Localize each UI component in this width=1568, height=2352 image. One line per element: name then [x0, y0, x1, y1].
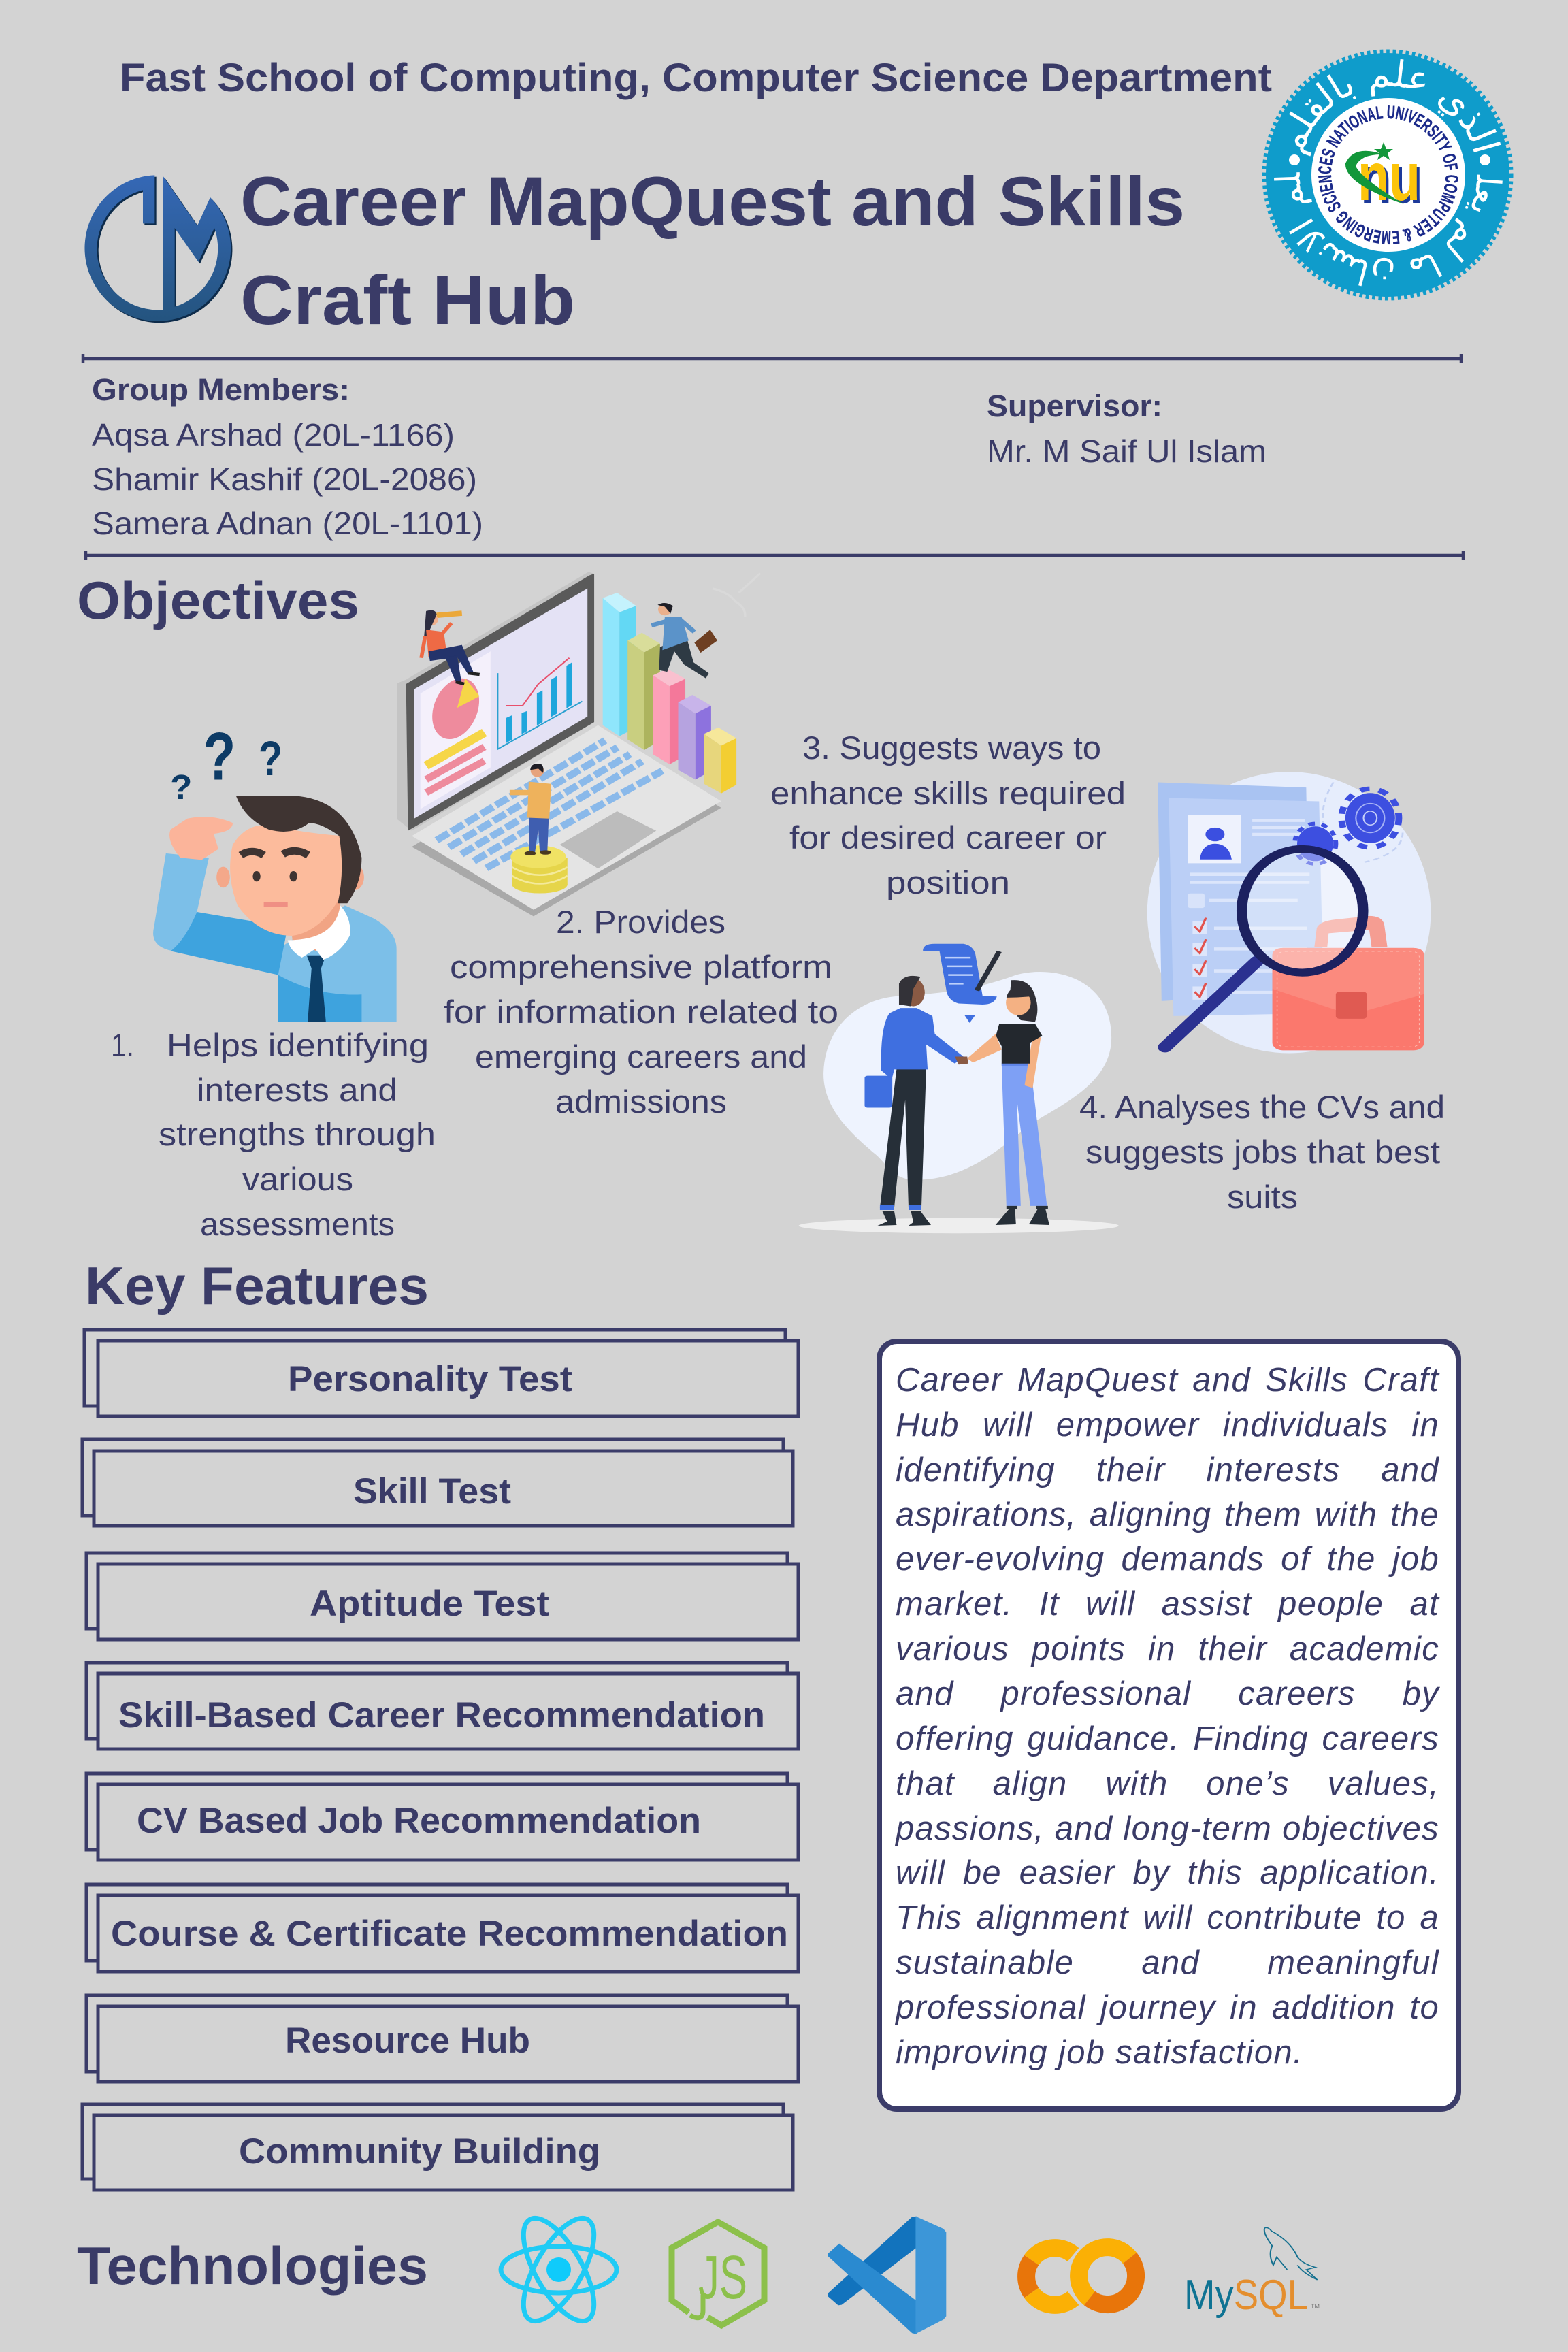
text panel: project description: professional journey in addition to [896, 1989, 1439, 2026]
text panel: project description: This alignment will contribute to a [896, 1899, 1439, 1936]
text: supervisor [987, 389, 1267, 469]
text: objective 2: emerging careers and [475, 1039, 807, 1075]
text panel: project description: offering guidance. Finding careers [896, 1720, 1439, 1757]
feature: resource hub [86, 1995, 798, 2082]
feature: skill test: Skill Test [353, 1471, 511, 1512]
text: group members: Aqsa Arshad (20L-1166) [92, 417, 455, 453]
text: objective 1: Helps identifying [167, 1027, 429, 1063]
text: objective 2: for information related to [444, 994, 838, 1030]
text: objective 1: 1. [111, 1027, 134, 1063]
illustration: thinking man with question marks [153, 719, 397, 1022]
icon: vs code [828, 2217, 946, 2334]
feature: personality test: Personality Test [288, 1359, 572, 1399]
feature: skill-based career recommendation: Skill-Based Career Recommendation [118, 1695, 765, 1735]
text: supervisor: Supervisor: [987, 389, 1162, 423]
text panel: project description: improving job satisfaction. [896, 2034, 1303, 2071]
feature: skill test [82, 1439, 793, 1526]
icon: react [501, 2208, 617, 2332]
text panel: project description: will be easier by this application. [896, 1855, 1439, 1891]
illustration: thinking man with question marks: ? [259, 731, 282, 785]
heading: key features: Key Features [85, 1256, 429, 1316]
text: objective 4: suits [1227, 1179, 1298, 1215]
text: objective 3: enhance skills required [770, 775, 1126, 811]
logo: university seal: NATIONAL UNIVERSITY OF COMPUTER & EMERGING SCIENCES [1318, 105, 1458, 245]
illustration: handshake with contract [799, 944, 1119, 1233]
icon: mysql [1184, 2227, 1320, 2319]
feature: community building [82, 2104, 793, 2190]
icon: mysql: TM [1311, 2303, 1320, 2310]
text panel: project description: ever-evolving demands of the job [896, 1541, 1439, 1578]
icon: node js: JS [698, 2244, 747, 2312]
feature: skill-based career recommendation [86, 1663, 798, 1749]
icon: mysql: MySQL [1184, 2272, 1308, 2319]
text panel: project description: sustainable and meaningful [896, 1944, 1439, 1981]
feature: aptitude test [86, 1553, 798, 1639]
text panel: project description: market. It will assist people at [896, 1586, 1439, 1622]
text: group members: Samera Adnan (20L-1101) [92, 506, 483, 541]
text: objective 4: 4. Analyses the CVs and [1079, 1089, 1445, 1125]
logo: university seal: nu [1360, 142, 1423, 218]
text panel: project description [877, 1339, 1461, 2112]
text: objective 2: 2. Provides [556, 904, 725, 940]
text panel: project description: that align with one’s values, [896, 1765, 1439, 1802]
text: group members [92, 372, 483, 541]
title [240, 163, 1185, 339]
logo: university seal [1262, 49, 1514, 301]
text: objective 2: comprehensive platform [450, 949, 832, 985]
text: objective 3: 3. Suggests ways to [802, 730, 1101, 766]
text: group members: Shamir Kashif (20L-2086) [92, 461, 477, 497]
header: school and department: Fast School of Computing, Computer Science Department [120, 56, 1272, 100]
feature: resource hub: Resource Hub [285, 2021, 530, 2061]
text panel: project description: Hub will empower individuals in [896, 1407, 1439, 1443]
text: objective 1: assessments [200, 1206, 395, 1242]
icon: colab [1026, 2247, 1136, 2305]
text panel: project description: identifying their interests and [896, 1452, 1439, 1488]
text panel: project description: aspirations, aligning them with the [896, 1497, 1439, 1533]
text: objective 1 [111, 1027, 436, 1242]
text: objective 4 [1079, 1089, 1445, 1215]
text panel: project description: passions, and long-term objectives [896, 1810, 1439, 1847]
feature: personality test [84, 1330, 798, 1416]
illustration: laptop with charts and figures [397, 572, 760, 916]
text panel: project description: and professional careers by [896, 1676, 1439, 1712]
text: supervisor: Mr. M Saif Ul Islam [987, 434, 1267, 469]
title: Career MapQuest and Skills [240, 163, 1185, 240]
text: objective 4: suggests jobs that best [1085, 1134, 1440, 1170]
feature: course and certificate recommendation: Course & Certificate Recommendation [111, 1914, 788, 1954]
text: objective 3: for desired career or [789, 819, 1107, 855]
feature: cv based job recommendation: CV Based Job Recommendation [137, 1801, 701, 1841]
text: objective 2: admissions [555, 1083, 727, 1120]
text panel: project description: various points in their academic [896, 1631, 1439, 1667]
icon: node js [672, 2222, 764, 2325]
text: objective 3: position [886, 864, 1010, 900]
text: objective 2 [444, 904, 838, 1120]
title: Craft Hub [240, 261, 575, 339]
illustration: thinking man with question marks: ? [203, 719, 235, 794]
feature: community building: Community Building [239, 2132, 600, 2172]
heading: technologies: Technologies [77, 2236, 428, 2296]
logo: university seal: الذي علم بالقلم [1289, 59, 1501, 157]
text: objective 1: various [242, 1161, 353, 1197]
logo: CM monogram [84, 175, 232, 323]
logo: university seal: nu [1358, 139, 1420, 215]
text: objective 1: interests and [197, 1072, 397, 1108]
heading: objectives: Objectives [77, 570, 359, 630]
feature: course and certificate recommendation [86, 1884, 798, 1972]
text: objective 3 [770, 730, 1126, 900]
panel: key features list [82, 1330, 798, 2190]
illustration: thinking man with question marks: ? [170, 768, 192, 807]
feature: aptitude test: Aptitude Test [310, 1584, 549, 1624]
text: objective 1: strengths through [159, 1116, 436, 1152]
illustration: CV magnifier and briefcase [1147, 772, 1431, 1053]
text: group members: Group Members: [92, 372, 350, 407]
feature: cv based job recommendation [86, 1774, 798, 1860]
text panel: project description: Career MapQuest and Skills Craft [896, 1362, 1439, 1399]
